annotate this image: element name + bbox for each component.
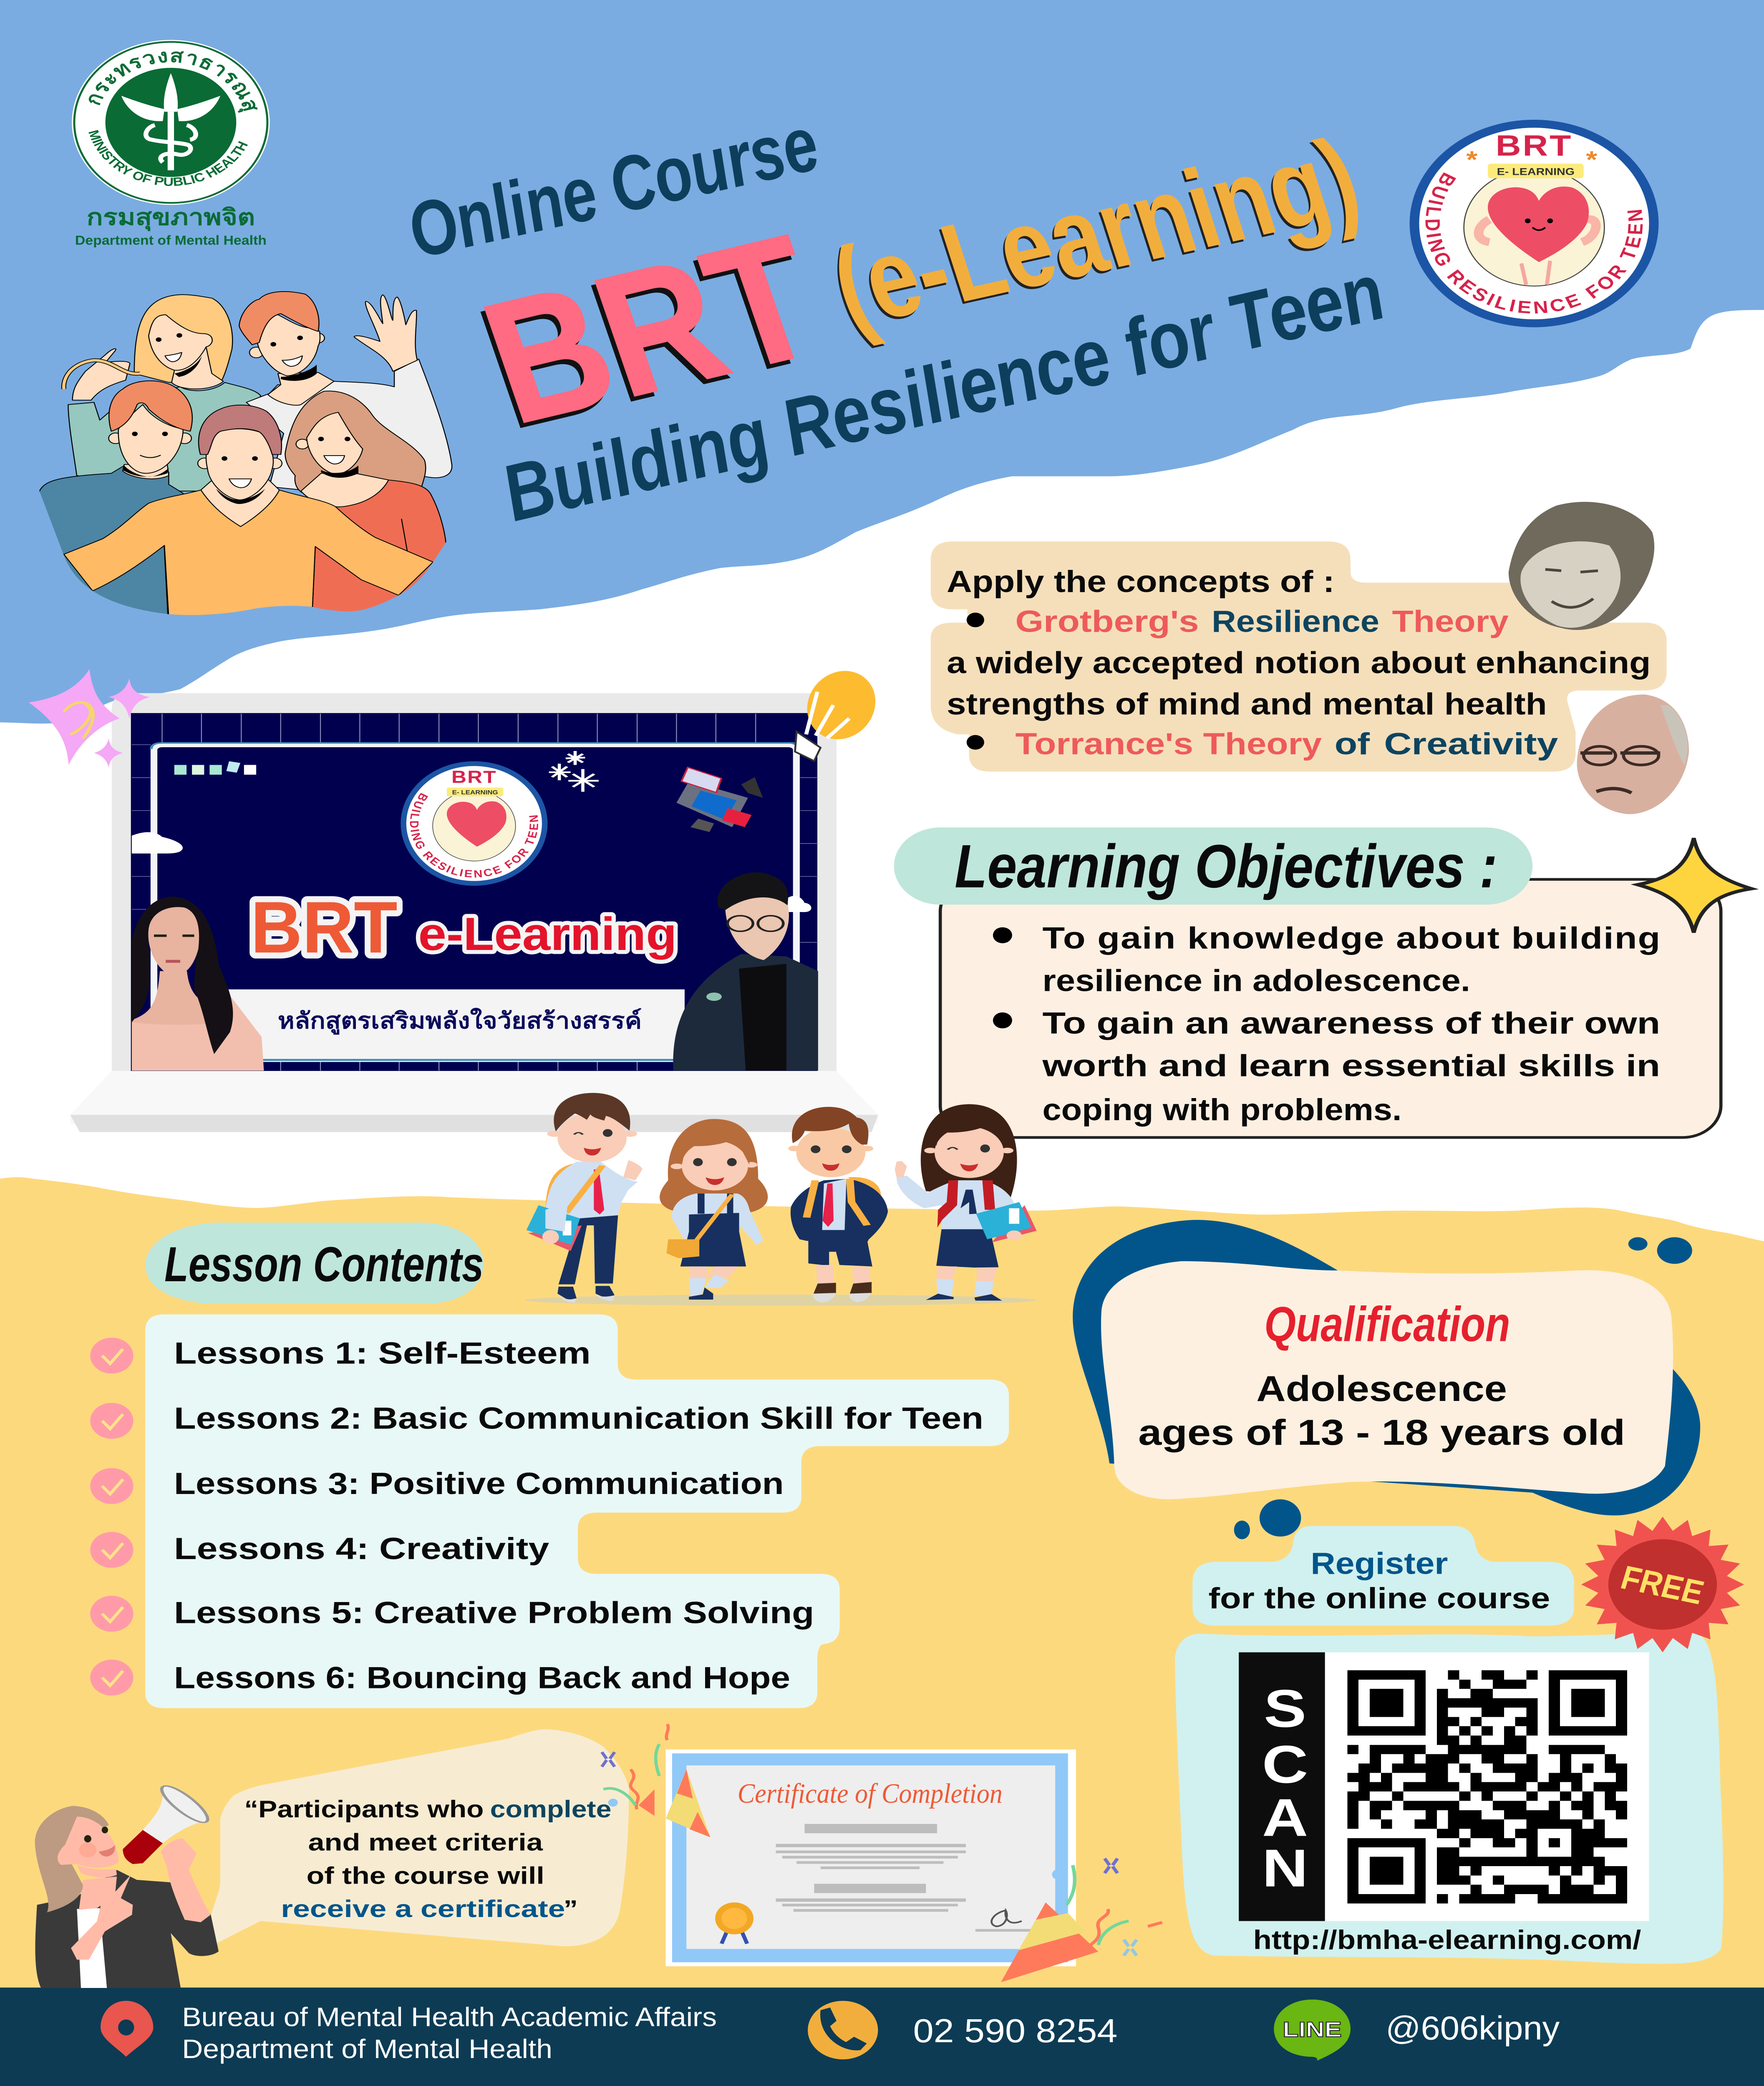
objectives text bbox=[993, 921, 1660, 1127]
objectives text: To gain knowledge about building bbox=[1043, 921, 1660, 955]
panel: Register: Register bbox=[1310, 1547, 1448, 1581]
text: Torrance's Theory of Creativity bbox=[1015, 727, 1558, 761]
lesson 5: Lessons 5: Creative Problem Solving bbox=[174, 1596, 814, 1630]
party popper: bottom bbox=[1001, 1859, 1162, 1982]
logo: BRT e-learning badge bbox=[1410, 120, 1658, 327]
illustration: laptop bbox=[70, 693, 878, 1132]
illustration: four school children bbox=[525, 1093, 1037, 1306]
screen badge: BRT logo: E- LEARNING bbox=[452, 789, 498, 796]
quote text bbox=[244, 1796, 611, 1922]
quote text: and meet criteria bbox=[308, 1829, 543, 1856]
illustration: group of five teenagers bbox=[34, 292, 452, 617]
icon: location pin bbox=[101, 2001, 153, 2057]
child 4: girl with red backpack bbox=[895, 1104, 1037, 1301]
text: Grotberg's Resilience Theory: Resilience bbox=[1212, 605, 1379, 639]
bullet: Grotberg bbox=[967, 612, 984, 627]
quote text: of the course will bbox=[307, 1863, 544, 1889]
SCAN strip: S bbox=[1264, 1678, 1306, 1738]
objectives text: worth and learn essential skills in bbox=[1042, 1049, 1660, 1083]
panel: lessons list bbox=[90, 1315, 1009, 1708]
presenter: woman bbox=[132, 897, 264, 1071]
icon: lightbulb bbox=[795, 665, 885, 761]
title: Online Course: Online Course bbox=[397, 101, 829, 274]
text: notion description: a widely accepted notion about enhancing bbox=[947, 646, 1651, 680]
text: Apply the concepts of: Apply the concepts of : bbox=[947, 565, 1335, 599]
child 3: boy in jacket bbox=[788, 1107, 888, 1302]
text: strengths line: strengths of mind and mental health bbox=[947, 687, 1547, 721]
text: Adolescence ages bbox=[1138, 1369, 1625, 1453]
lesson 2: Lessons 2: Basic Communication Skill for Teen bbox=[174, 1402, 983, 1436]
QR code image bbox=[1325, 1652, 1649, 1921]
text: Grotberg's Resilience Theory: Grotberg's bbox=[1015, 605, 1199, 639]
speech bubble: certificate note bbox=[198, 1729, 629, 1953]
logo: BRT e-learning badge: * bbox=[1586, 146, 1598, 173]
logo: Ministry of Public Health: กระทรวงสาธารณสุข bbox=[80, 45, 264, 126]
text: Grotberg's Resilience Theory: Theory bbox=[1392, 605, 1509, 639]
decorative blue dots bbox=[1234, 1237, 1692, 1539]
screen title: BRT e-Learning: BRT bbox=[251, 887, 398, 968]
heading pill: Lesson Contents bbox=[145, 1222, 484, 1304]
lesson 3: Lessons 3: Positive Communication bbox=[174, 1467, 784, 1501]
badge: FREE bbox=[1581, 1517, 1744, 1652]
icon: pink sparkles bbox=[29, 669, 150, 768]
lesson 4: Lessons 4: Creativity bbox=[174, 1532, 549, 1566]
SCAN strip bbox=[1239, 1652, 1325, 1921]
bullet: Torrance bbox=[967, 735, 984, 750]
text: Torrance's Theory of Creativity: Torrance's Theory bbox=[1015, 727, 1322, 761]
footer: LINE bbox=[1274, 2000, 1560, 2061]
logo: BRT e-learning badge: * bbox=[1466, 146, 1478, 173]
panel: Learning Objectives bbox=[894, 827, 1751, 1137]
footer: phone: 02 590 8254 bbox=[913, 2012, 1117, 2049]
panel: Apply the concepts bbox=[931, 542, 1667, 771]
footer: address: Bureau of Mental Health Academic Affairs bbox=[182, 2002, 717, 2032]
presenter: man bbox=[673, 872, 818, 1071]
panel: Register: for the online course bbox=[1208, 1582, 1550, 1615]
footer: LINE: LINE bbox=[1283, 2018, 1342, 2041]
child 2: girl with bag bbox=[660, 1119, 768, 1300]
icon: yellow star bbox=[1638, 838, 1751, 932]
title: (e-Learning): (e-Learning) bbox=[818, 114, 1373, 351]
objectives text: resilience in adolescence. bbox=[1043, 964, 1470, 998]
heading pill: Learning Objectives bbox=[894, 827, 1532, 904]
footer bar bbox=[0, 1988, 1764, 2086]
SCAN strip: C bbox=[1262, 1734, 1308, 1794]
text: Adolescence ages: ages of 13 - 18 years old bbox=[1138, 1413, 1625, 1453]
text: Adolescence ages: Adolescence bbox=[1256, 1369, 1507, 1409]
background: yellow bottom wave bbox=[0, 1177, 1764, 1995]
text: Grotberg's Resilience Theory bbox=[1015, 605, 1509, 639]
footer: LINE: @606kipny bbox=[1386, 2009, 1560, 2047]
footer: phone bbox=[808, 2001, 1117, 2059]
logo: BRT e-learning badge: BUILDING RESILIENCE FOR TEEN bbox=[1421, 169, 1648, 317]
child 1: boy with book bbox=[527, 1093, 642, 1302]
certificate bbox=[666, 1749, 1076, 1966]
title: Building Resilience for Teen: Building Resilience for Teen bbox=[491, 247, 1396, 538]
title: (e-Learning): (e-Learning) bbox=[816, 116, 1372, 353]
logo: BRT e-learning badge: E- LEARNING bbox=[1497, 166, 1575, 177]
text: Torrance's Theory of Creativity: Creativity bbox=[1384, 727, 1558, 761]
party popper: top bbox=[602, 1724, 711, 1837]
screen caption: Thai course name: หลักสูตรเสริมพลังใจวัยสร้างสรรค์ bbox=[278, 1008, 642, 1035]
SCAN strip: N bbox=[1262, 1838, 1308, 1898]
medal bbox=[715, 1902, 753, 1944]
objectives text: coping with problems. bbox=[1043, 1093, 1401, 1127]
screen title: BRT e-Learning bbox=[251, 887, 677, 968]
title: BRT: BRT bbox=[459, 204, 838, 465]
lesson 6: Lessons 6: Bouncing Back and Hope bbox=[174, 1661, 790, 1695]
quote text: ” bbox=[564, 1896, 578, 1922]
logo caption: Department of Mental Health: Department of Mental Health bbox=[75, 233, 267, 248]
illustration: woman with megaphone bbox=[35, 1784, 219, 1988]
logo: Ministry of Public Health bbox=[72, 40, 270, 205]
text: Torrance's Theory of Creativity: of bbox=[1335, 727, 1370, 761]
panel: Qualification bbox=[1073, 1220, 1700, 1515]
badge: FREE: FREE bbox=[1617, 1558, 1708, 1611]
photo: Torrance portrait bbox=[1577, 695, 1689, 814]
screen title: BRT e-Learning: e-Learning bbox=[418, 908, 677, 960]
footer: address: Department of Mental Health bbox=[182, 2034, 552, 2064]
panel: QR code bbox=[1175, 1633, 1723, 1964]
SCAN strip: A bbox=[1262, 1788, 1308, 1847]
title: BRT: BRT bbox=[462, 199, 841, 460]
lesson 1: Lessons 1: Self-Esteem bbox=[174, 1336, 591, 1371]
quote text: receive a certificate bbox=[281, 1896, 565, 1922]
screen badge: BRT logo: BUILDING RESILIENCE FOR TEEN bbox=[407, 791, 541, 880]
logo: BRT e-learning badge: BRT bbox=[1496, 130, 1572, 162]
logo caption: Department of Mental Health: กรมสุขภาพจิต bbox=[86, 204, 255, 231]
laptop screen bbox=[131, 713, 818, 1071]
quote text: complete bbox=[490, 1796, 611, 1823]
text: Qualification: Qualification bbox=[1264, 1296, 1510, 1352]
logo: Ministry of Public Health: MINISTRY OF PUBLIC HEALTH bbox=[85, 128, 251, 189]
text: course URL: http://bmha-elearning.com/ bbox=[1253, 1925, 1641, 1955]
objectives text: To gain an awareness of their own bbox=[1043, 1006, 1660, 1040]
screen badge: BRT logo bbox=[401, 761, 547, 886]
heading pill: Lesson Contents: Lesson Contents bbox=[164, 1237, 484, 1292]
panel: Register bbox=[1192, 1526, 1574, 1626]
screen badge: BRT logo: BRT bbox=[451, 767, 497, 786]
heading pill: Learning Objectives: Learning Objectives : bbox=[955, 832, 1497, 901]
footer: address bbox=[101, 2001, 717, 2064]
background: blue top wave bbox=[0, 0, 1764, 723]
screen art: grid and frame bbox=[132, 714, 818, 1071]
title: (e-Learning) bbox=[816, 114, 1374, 353]
certificate heading: Certificate of Completion bbox=[738, 1778, 1003, 1809]
photo: Grotberg portrait bbox=[1509, 502, 1654, 630]
quote text: “Participants who bbox=[244, 1796, 484, 1823]
logo caption: Department of Mental Health bbox=[75, 204, 267, 248]
